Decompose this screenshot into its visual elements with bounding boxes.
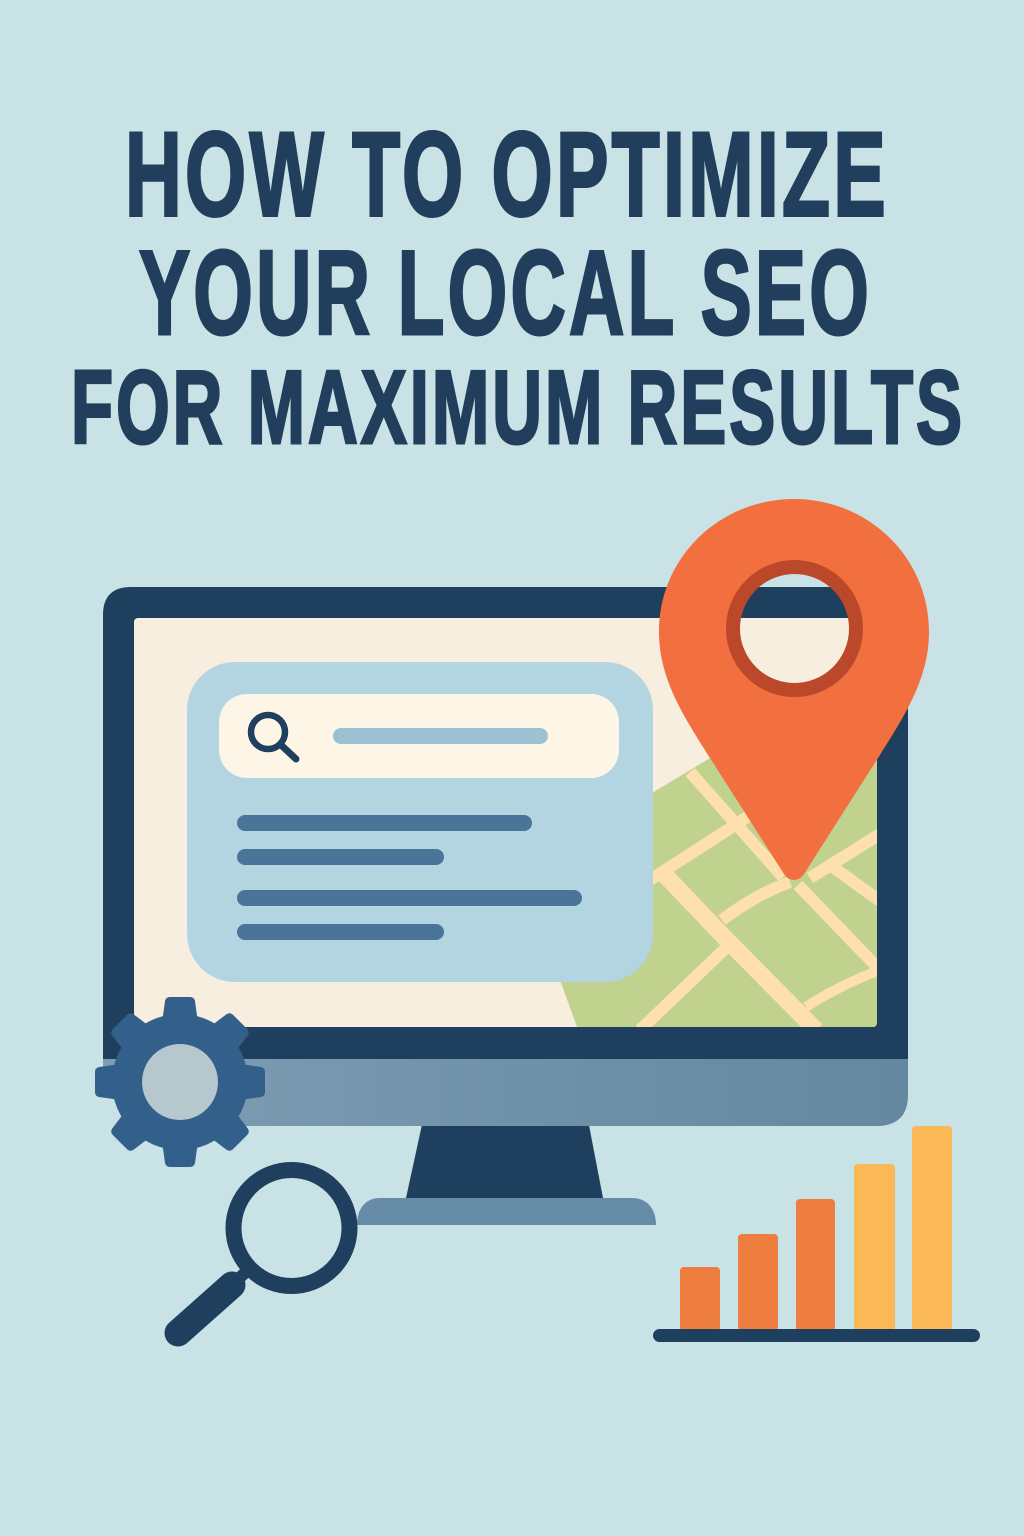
monitor base [357,1198,656,1225]
monitor frame [103,587,908,1059]
monitor [103,587,908,1225]
monitor stand [406,1120,603,1198]
map [560,758,877,1027]
icon: gear [95,997,265,1167]
monitor chin [103,1059,908,1126]
title [71,108,965,466]
screen [134,618,877,1027]
search query line [333,728,548,744]
icon: search magnifier [251,715,296,759]
bar chart [653,1126,980,1342]
search results lines [237,815,582,940]
search bar [219,694,619,778]
search panel [187,662,653,982]
icon: location pin [659,499,929,880]
pin hole showing what lies behind [740,574,849,683]
pin ring [733,567,856,690]
icon: magnifying glass [178,1170,350,1333]
